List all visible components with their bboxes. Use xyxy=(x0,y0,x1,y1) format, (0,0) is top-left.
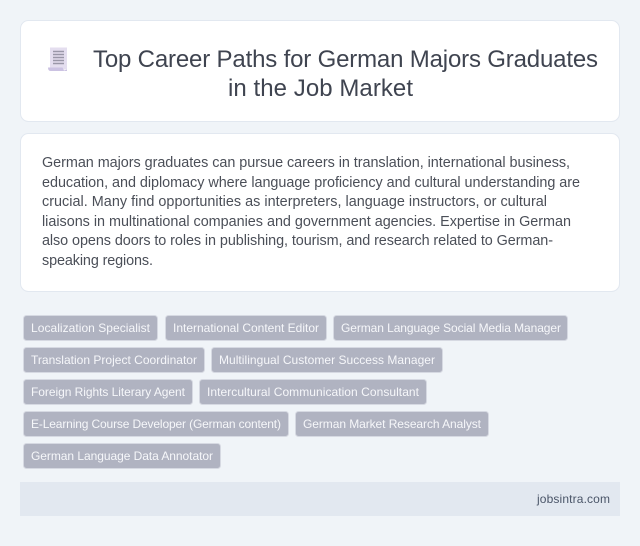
text block: description: crucial. Many find opportunities as interpreters, language instructors, or cultural xyxy=(42,194,547,210)
tag: Foreign Rights Literary Agent xyxy=(24,380,192,404)
tag: German Market Research Analyst xyxy=(296,412,488,436)
tag: E-Learning Course Developer: E-Learning Course Developer (German content) xyxy=(31,417,281,431)
text block: description xyxy=(42,155,580,269)
tag: Intercultural Communication Consultant xyxy=(200,380,426,404)
footer xyxy=(20,482,620,516)
title: Top Career Paths for German Majors Graduates xyxy=(93,46,598,73)
tag: Localization Specialist: Localization Specialist xyxy=(31,321,151,335)
tag: Intercultural Communication Consultant: Intercultural Communication Consultant xyxy=(207,385,420,399)
tag: E-Learning Course Developer xyxy=(24,412,288,436)
icon: document scroll xyxy=(48,48,67,71)
text block: description: speaking regions. xyxy=(42,253,153,269)
footer text: jobsintra.com xyxy=(536,492,610,506)
title: in the Job Market xyxy=(228,75,413,102)
tag: German Language Data Annotator: German Language Data Annotator xyxy=(31,449,213,463)
tag: Multilingual Customer Success Manager xyxy=(212,348,442,372)
text block: description: German majors graduates can pursue careers in translation, international business, xyxy=(42,155,570,171)
text block: description: education, and diplomacy where language proficiency and cultural understanding are xyxy=(42,175,580,191)
tag: German Language Data Annotator xyxy=(24,444,220,468)
tag: International Content Editor: International Content Editor xyxy=(173,321,319,335)
tag: German Market Research Analyst: German Market Research Analyst xyxy=(303,417,482,431)
text block: description: also opens doors to roles in publishing, tourism, and research related to German- xyxy=(42,233,553,249)
tag: International Content Editor xyxy=(166,316,326,340)
tag: Foreign Rights Literary Agent: Foreign Rights Literary Agent xyxy=(31,385,186,399)
panel: header xyxy=(20,20,620,122)
tag: Multilingual Customer Success Manager: Multilingual Customer Success Manager xyxy=(219,353,435,367)
text block: description: liaisons in multinational companies and government agencies. Expertise in German xyxy=(42,214,571,230)
tag: German Language Social Media Manager: German Language Social Media Manager xyxy=(341,321,561,335)
title xyxy=(93,46,598,102)
tag: German Language Social Media Manager xyxy=(334,316,568,340)
panel: description xyxy=(20,134,620,292)
tag list xyxy=(24,316,568,468)
tag: Localization Specialist xyxy=(24,316,158,340)
tag: Translation Project Coordinator: Translation Project Coordinator xyxy=(31,353,197,367)
tag: Translation Project Coordinator xyxy=(24,348,204,372)
